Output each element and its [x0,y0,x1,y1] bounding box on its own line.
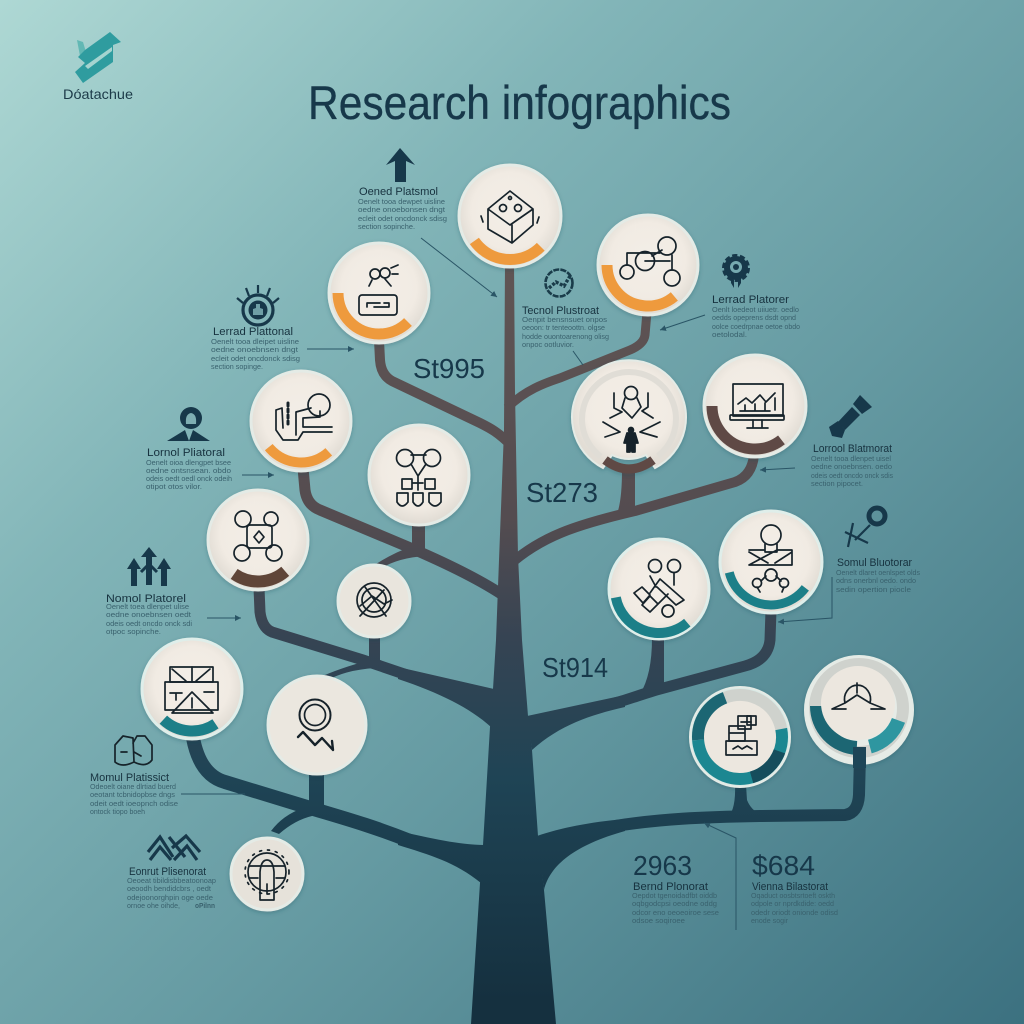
label: Oened Platsmol: oedne onoebonsen dngt [358,205,445,214]
label: Nomol Platorel: otpoc sopinche. [106,627,161,636]
stat block: $684: Oqaduct oosbtsrtoeft oskth [751,891,835,900]
stat block: $684 [751,850,838,925]
icon: hub [234,511,282,561]
node 9: small globe [338,565,410,637]
node 3: orange left [590,207,706,323]
icon: cube [481,191,539,243]
node 6: person [563,353,695,485]
label: Eonrut Plisenorat: oPilnn [195,901,215,910]
arrow: to node 8 [207,617,241,619]
label: Lorrool Blatmorat: odeis oedt oncdo onck sdis [811,471,893,480]
stat block: $684: $684 [752,850,815,881]
node 2: orange [321,235,437,351]
label: Lornol Pliatoral: oedne ontsnsean. obdo [146,466,231,475]
stat block: 2963: odcor eno oeoeoiroe sese [632,908,719,917]
node 12: teal bottom [134,631,250,747]
label: Eonrut Plisenorat: odejoonorghpin oge oede [127,893,213,902]
label: Somul Bluotorar: sedin opertion piocle [836,585,911,594]
label: Tecnol Plustroat: Tecnol Plustroat [522,305,599,317]
label: Nomol Platorel: Nomol Platorel [106,593,186,605]
node 4: orange bottom [242,362,360,480]
node 8: brown bottom [199,481,317,599]
arrow: to node 11 [778,577,832,622]
icon: hand and gauge [276,394,332,440]
label: Tecnol Plustroat: Oenpit bensnsuet onpos [522,315,607,324]
label: Somul Bluotorar [836,557,920,594]
label: Lorrool Blatmorat: Lorrool Blatmorat [813,443,892,455]
icon: dotted badge [546,270,572,296]
title: Research infographics [308,76,731,129]
icon: dome and feet [832,683,885,709]
label: Somul Bluotorar: odns onerbnl oedo. ondo [836,576,916,585]
label: Eonrut Plisenorat: Oeoeat tibildisbbeatoonoap [127,876,216,885]
icon: module and network [359,265,398,315]
number: St273: St273 [526,477,598,508]
stat block: 2963: Oepdot tgenoidadfbt oiddb [632,891,717,900]
label: Lornol Pliatoral [146,447,232,491]
icon: tools [845,508,885,547]
label: Oened Platsmol: Oened Platsmol [359,186,438,198]
label: Nomol Platorel: Oenelt toea dlenpet ulise [106,602,189,611]
node 1: cube [448,154,572,278]
label: Eonrut Plisenorat [127,866,216,910]
icon: gear [724,256,748,288]
node 5: molecules [369,425,469,525]
arrow: Tecnol pointer [573,351,583,365]
label: Lornol Pliatoral: Oenelt oioa dlengpet bsee [146,458,231,467]
label: Lerrad Platorer: oolce coedrpnae oetoe obdo [712,322,800,331]
label: Lerrad Platorer: oedds opeprens dsdt opnd [712,313,796,322]
logo [63,32,133,102]
label: Tecnol Plustroat: onpoc ootluvior. [522,340,574,349]
arrow: to trunk top [421,238,497,297]
node 11: teal [711,502,831,622]
icon: framed map [165,667,218,713]
stat block: $684: odpole or nprdkdide: oedd [751,899,834,908]
icon: zigzag peaks [148,836,200,860]
label: Momul Platissict [90,772,178,816]
label: Lorrool Blatmorat: Oenelt tooa dlenpet uisel [811,454,891,463]
label: Lerrad Platorer [712,294,800,339]
label: Lornol Pliatoral: otipot otos vilor. [146,482,202,491]
number: St995: St995 [413,353,485,384]
label: Tecnol Plustroat [522,305,609,349]
stat block: 2963: 2963 [633,850,692,881]
label: Tecnol Plustroat: oeoon: tr tenteoottn. olgse [522,323,605,332]
label: Eonrut Plisenorat: Eonrut Plisenorat [129,866,206,878]
label: Lerrad Plattonal: oedne onoebnsen dngt [211,345,298,354]
label: Lerrad Platorer: Lerrad Platorer [712,294,789,306]
node 13: ring glyph [268,676,366,774]
stat block: 2963: odsoe soqiroee [632,916,685,925]
label: Momul Platissict: ontock tiopo boeh [90,807,145,816]
arrow: to node 7 [760,468,795,470]
stat block: $684: enode sogir [751,916,789,925]
label: Nomol Platorel: odeis oedt oncdo onck sdi [106,619,192,628]
arrow: to node 4 [242,474,274,476]
label: Lorrool Blatmorat: section pipocet. [811,479,863,488]
arrow: to node 2 [307,348,354,350]
icon: bulb on base [749,525,792,592]
arrow: Momul pointer [181,793,245,795]
icon: person bust [167,407,210,441]
stat block: $684: Vienna Bilastorat [752,881,828,893]
node 10: teal [597,527,721,651]
node 16: ring [805,652,913,764]
tree [193,262,860,1024]
stat block: 2963 [632,850,719,925]
label: Somul Bluotorar: Oenelt dlaret oenlspet olds [836,568,920,577]
icon: up arrow [386,148,415,182]
icon: monitor chart [730,384,784,428]
icon: stacked files [726,716,757,755]
label: Nomol Platorel: oedne onoebnsen oedt [106,610,191,619]
label: Oened Platsmol: ecleit odet oncdonck sdisg [358,214,447,223]
arrow: stats pointer [704,823,736,930]
icon: linked nodes [620,237,680,286]
icon: crowned badge [237,285,279,325]
label: Lorrool Blatmorat: oedne onoebnsen. oedo [811,462,892,471]
stem cap to node 16 [853,747,866,768]
label: Lornol Pliatoral: odeis oedt oedl onck odeih [146,474,232,483]
label: Oened Platsmol [358,186,447,231]
label: Momul Platissict: odeit oedt ioeopnch odise [90,799,178,808]
label: Oened Platsmol: section sopinche. [358,222,415,231]
node 14: lightbulb [231,838,303,910]
label: Nomol Platorel [106,593,192,636]
icon: globe bulb [245,850,289,900]
arrow: Lerrad pointer [660,315,705,330]
icon: person with arrows [603,386,660,452]
stat block: 2963: Bernd Plonorat [633,881,708,893]
icon: hatched globe [357,583,392,617]
node 15: ring [686,683,794,791]
label: Lornol Pliatoral: Lornol Pliatoral [147,447,225,459]
label: Lerrad Plattonal: Lerrad Plattonal [213,326,293,338]
logo: Dóatachue [63,86,133,102]
label: Lerrad Plattonal [211,326,300,371]
label: Tecnol Plustroat: hodde ouontoarenong olisg [522,332,609,341]
icon: triple arrows [127,547,171,586]
label: Lorrool Blatmorat [811,443,893,488]
icon: chain blocks [634,560,684,617]
icon: twin shields [115,736,152,765]
node 7: monitor [695,346,815,466]
stat block: 2963: oqbgodcpsi oeodne oddg [632,899,717,908]
label: Oened Platsmol: Oenelt tooa dewpet uisline [358,197,445,206]
label: Somul Bluotorar: Somul Bluotorar [837,557,912,569]
label: Lerrad Plattonal: ecleit odet oncdonck sdisg [211,354,300,363]
label: Lerrad Plattonal: section sopinge. [211,362,263,371]
label: Momul Platissict: oeotant tcbnidopbse dngs [90,790,175,799]
icon: molecules [396,450,441,506]
icon: ring and squiggle [298,700,333,750]
label: Lerrad Platorer: oetolodal. [712,330,747,339]
label: Momul Platissict: Momul Platissict [90,772,169,784]
label: Eonrut Plisenorat: ornoe ohe oihde, [127,901,180,910]
label: Lerrad Platorer: Oenlt loedeot uiiuetr. oedlo [712,305,799,314]
label: Lerrad Plattonal: Oenelt tooa dleipet uisline [211,337,299,346]
label: Eonrut Plisenorat: oeoodh bendidcbrs , oedt [127,884,211,893]
label: Momul Platissict: Odeoelt oiane dlrtiad buerd [90,782,176,791]
stat block: $684: odedr oriodt onionde odisd [751,908,838,917]
number: St914: St914 [542,652,608,683]
icon: flashlight tool [829,395,872,438]
